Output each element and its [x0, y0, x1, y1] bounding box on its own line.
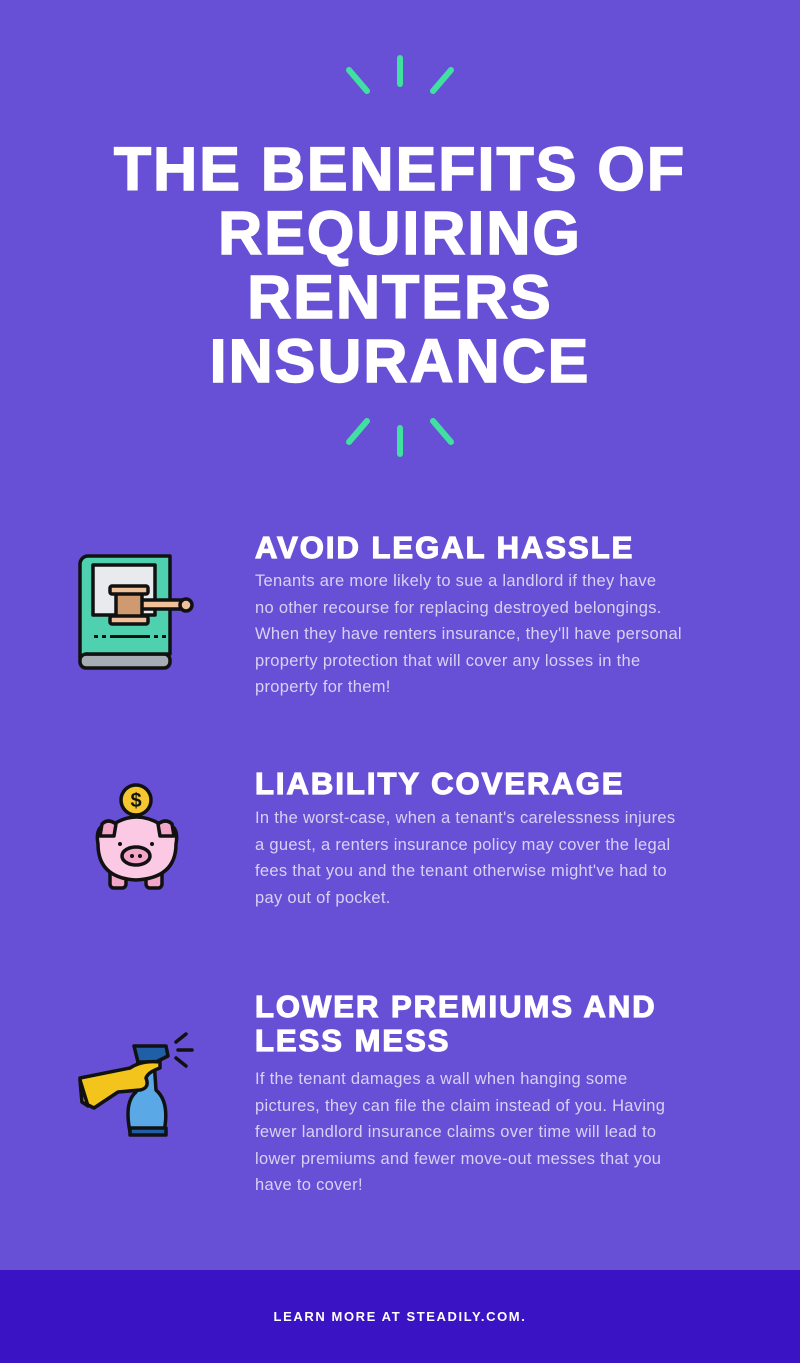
- burst top: [346, 55, 454, 94]
- icon: spray bottle with glove: [78, 1032, 194, 1137]
- text: liability coverage: pay out of pocket.: [255, 888, 391, 906]
- text: liability coverage: In the worst-case, when a tenant's carelessness injures: [255, 809, 675, 827]
- burst bottom: [346, 418, 454, 457]
- text: lower premiums: pictures, they can file the claim instead of you. Having: [255, 1096, 665, 1114]
- heading: lower premiums: LESS MESS: [255, 1023, 450, 1058]
- text: avoid legal hassle: no other recourse for replacing destroyed belongings.: [255, 598, 662, 616]
- title: THE BENEFITS OF: [114, 135, 686, 203]
- text: lower premiums: lower premiums and fewer move-out messes that you: [255, 1150, 661, 1168]
- text: avoid legal hassle: When they have renters insurance, they'll have personal: [255, 625, 682, 643]
- footer: [0, 1270, 800, 1363]
- footer: LEARN MORE AT STEADILY.COM.: [274, 1309, 526, 1324]
- heading: avoid legal hassle: AVOID LEGAL HASSLE: [255, 530, 634, 565]
- text: liability coverage: [255, 809, 675, 906]
- heading: lower premiums: [255, 989, 657, 1058]
- text: avoid legal hassle: property for them!: [255, 678, 391, 696]
- title: INSURANCE: [210, 327, 590, 395]
- icon: piggy bank: [96, 783, 178, 890]
- text: lower premiums: If the tenant damages a wall when hanging some: [255, 1070, 627, 1088]
- icon: law book with gavel: [78, 554, 194, 670]
- text: liability coverage: fees that you and the tenant otherwise might've had to: [255, 862, 667, 880]
- text: liability coverage: a guest, a renters insurance policy may cover the legal: [255, 836, 670, 854]
- text: avoid legal hassle: [255, 572, 682, 696]
- heading: liability coverage: LIABILITY COVERAGE: [255, 766, 625, 801]
- text: avoid legal hassle: property protection that will cover any losses in the: [255, 652, 640, 670]
- title: RENTERS: [247, 263, 553, 331]
- text: lower premiums: fewer landlord insurance claims over time will lead to: [255, 1123, 656, 1141]
- text: lower premiums: have to cover!: [255, 1176, 363, 1194]
- heading: lower premiums: LOWER PREMIUMS AND: [255, 989, 657, 1024]
- text: lower premiums: [255, 1070, 665, 1194]
- text: avoid legal hassle: Tenants are more likely to sue a landlord if they have: [255, 572, 656, 590]
- icon: piggy bank: $: [130, 790, 142, 812]
- title: [114, 135, 686, 395]
- title: REQUIRING: [218, 199, 582, 267]
